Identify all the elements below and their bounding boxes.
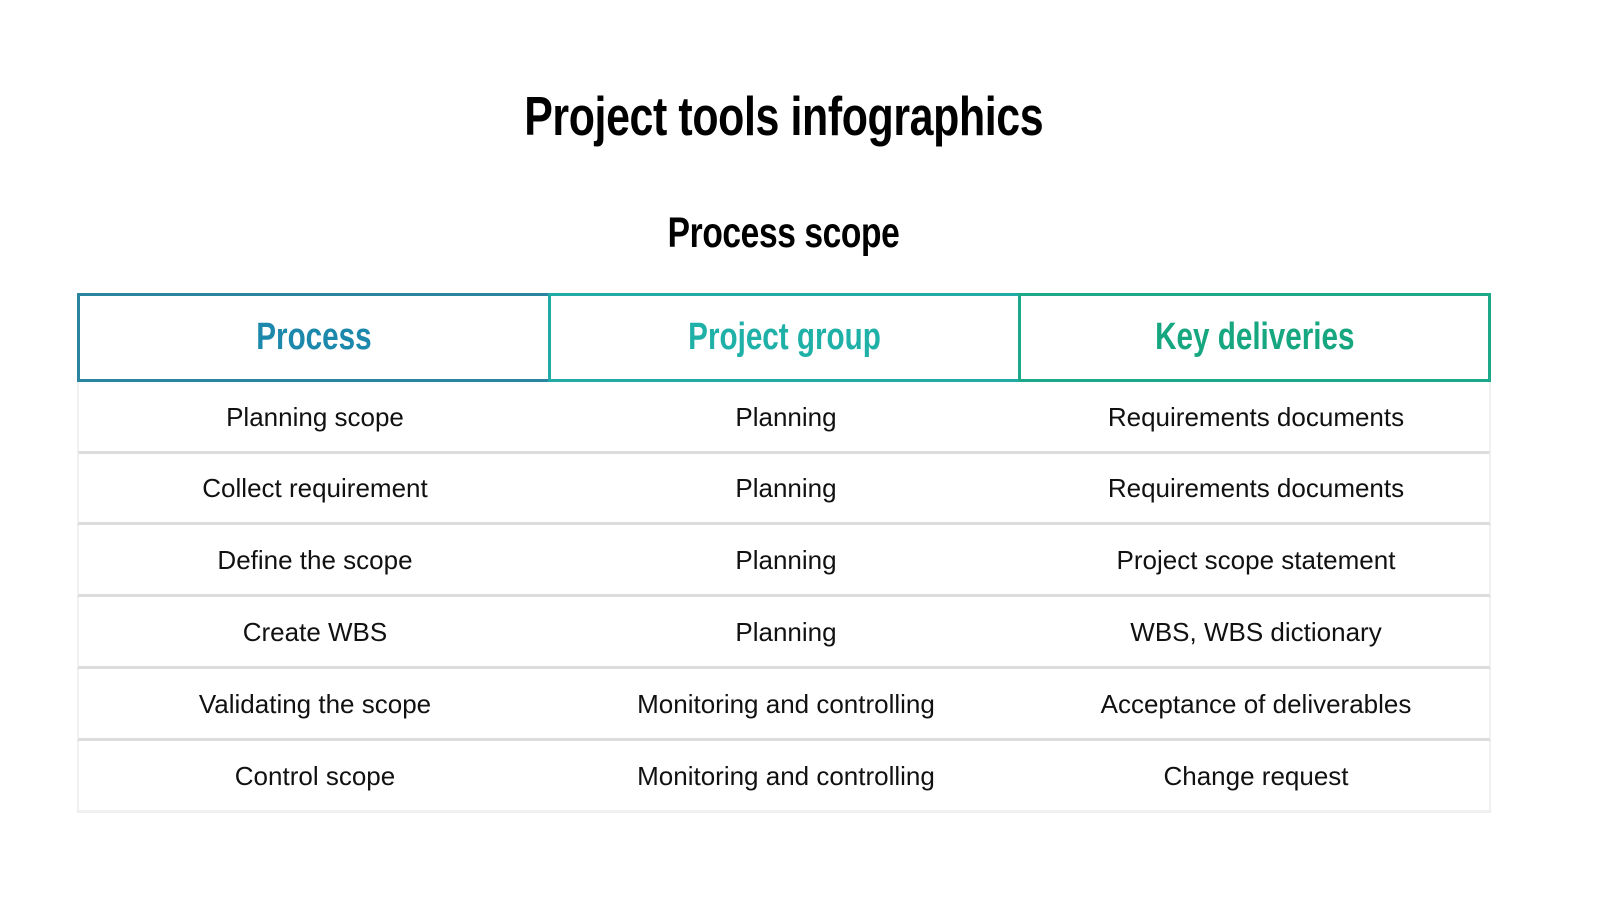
header: process: Process [256,316,372,358]
row 1 [77,382,1491,454]
header: process [77,293,551,382]
row 4: Planning [735,617,837,647]
row 4: WBS, WBS dictionary [1130,617,1382,647]
row 2: Collect requirement [202,473,428,503]
subtitle: Process scope [668,209,900,257]
header: project group [548,293,1021,382]
row 3: Planning [735,545,837,575]
header: key deliveries [1018,293,1491,382]
row 5: Acceptance of deliverables [1101,689,1411,719]
row 4: Create WBS [243,617,387,647]
title: Project tools infographics [524,85,1044,147]
row 1: Planning [735,402,837,432]
row 4 [77,597,1491,669]
row 5: Monitoring and controlling [637,689,935,719]
row 6: Control scope [235,761,395,791]
row 6: Change request [1163,761,1349,791]
row 2: Requirements documents [1108,473,1404,503]
row 3: Project scope statement [1117,545,1395,575]
header: project group: Project group [688,316,881,358]
row 2: Planning [735,473,837,503]
row 5 [77,669,1491,741]
row 3 [77,525,1491,597]
header: key deliveries: Key deliveries [1155,316,1354,358]
row 2 [77,453,1491,525]
row 1: Planning scope [226,402,404,432]
row 6 [77,741,1491,813]
row 1: Requirements documents [1108,402,1404,432]
row 6: Monitoring and controlling [637,761,935,791]
row 5: Validating the scope [199,689,431,719]
row 3: Define the scope [217,545,413,575]
